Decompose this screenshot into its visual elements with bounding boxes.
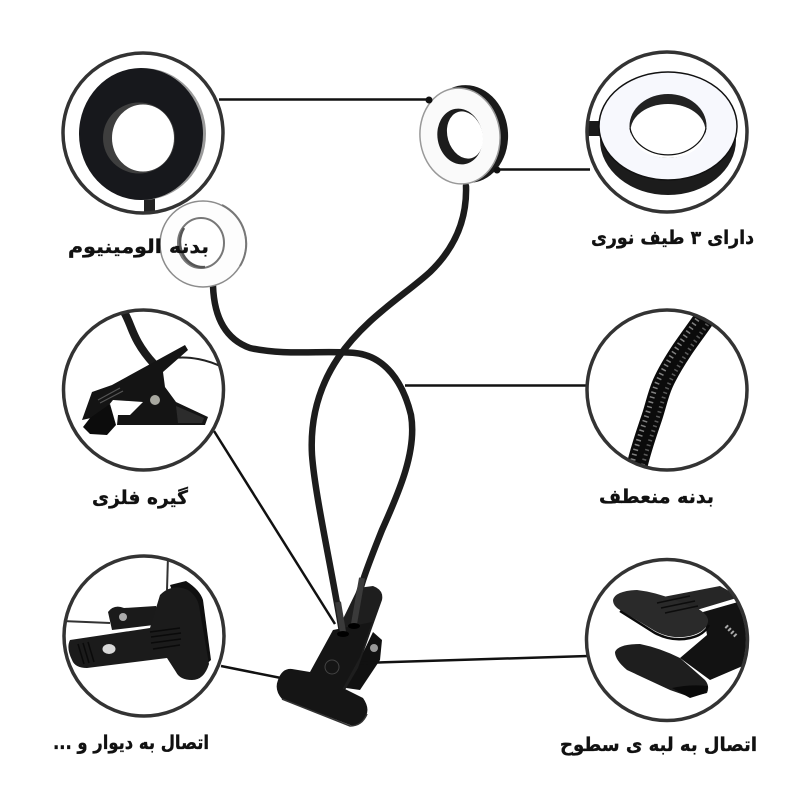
arm sockets [338,578,362,632]
panel: wall mount [53,556,224,754]
rubber pad [83,404,116,435]
leader line: flexible body [405,384,587,387]
upper ring light [415,81,513,188]
detail photo: clip top view [62,556,211,680]
label: بدنه الومینیوم [68,236,209,258]
label: اتصال به دیوار و ... [53,732,209,754]
flexible arm: upper ring [312,186,466,632]
panel: metal clip [64,310,224,509]
leader dot [426,96,432,104]
leader line: aluminium body [219,98,428,101]
leader line: wall mount [221,666,281,678]
leader dot: spectrum [494,166,500,174]
detail photo: ring back [79,68,206,216]
leader line: surface edge mount [360,656,588,663]
detail photo: clip jaws [613,586,752,698]
screw [150,395,160,405]
label: اتصال به لبه ی سطوح [560,734,757,756]
label: دارای ۳ طیف نوری [591,227,754,249]
T-shaped plate [277,622,372,726]
label: بدنه منعطف [599,486,714,508]
back jaw [346,632,382,690]
panel: flexible body [587,310,747,508]
leader line: metal clip [214,431,335,624]
detail photo: clip side view [82,312,222,435]
flexible arm: left ring [213,286,412,630]
panel: aluminium body [63,53,223,258]
clip body [82,345,208,425]
panel: three light spectrums [586,52,754,249]
panel: surface edge mount [560,560,757,756]
top lever [335,586,382,690]
detail photo: lit ring [586,72,737,195]
leader line: light spectrum [497,168,590,171]
detail photo: gooseneck [631,311,713,473]
left small ring light [160,201,246,287]
central clamp [277,578,382,726]
label: گیره فلزی [92,486,189,509]
